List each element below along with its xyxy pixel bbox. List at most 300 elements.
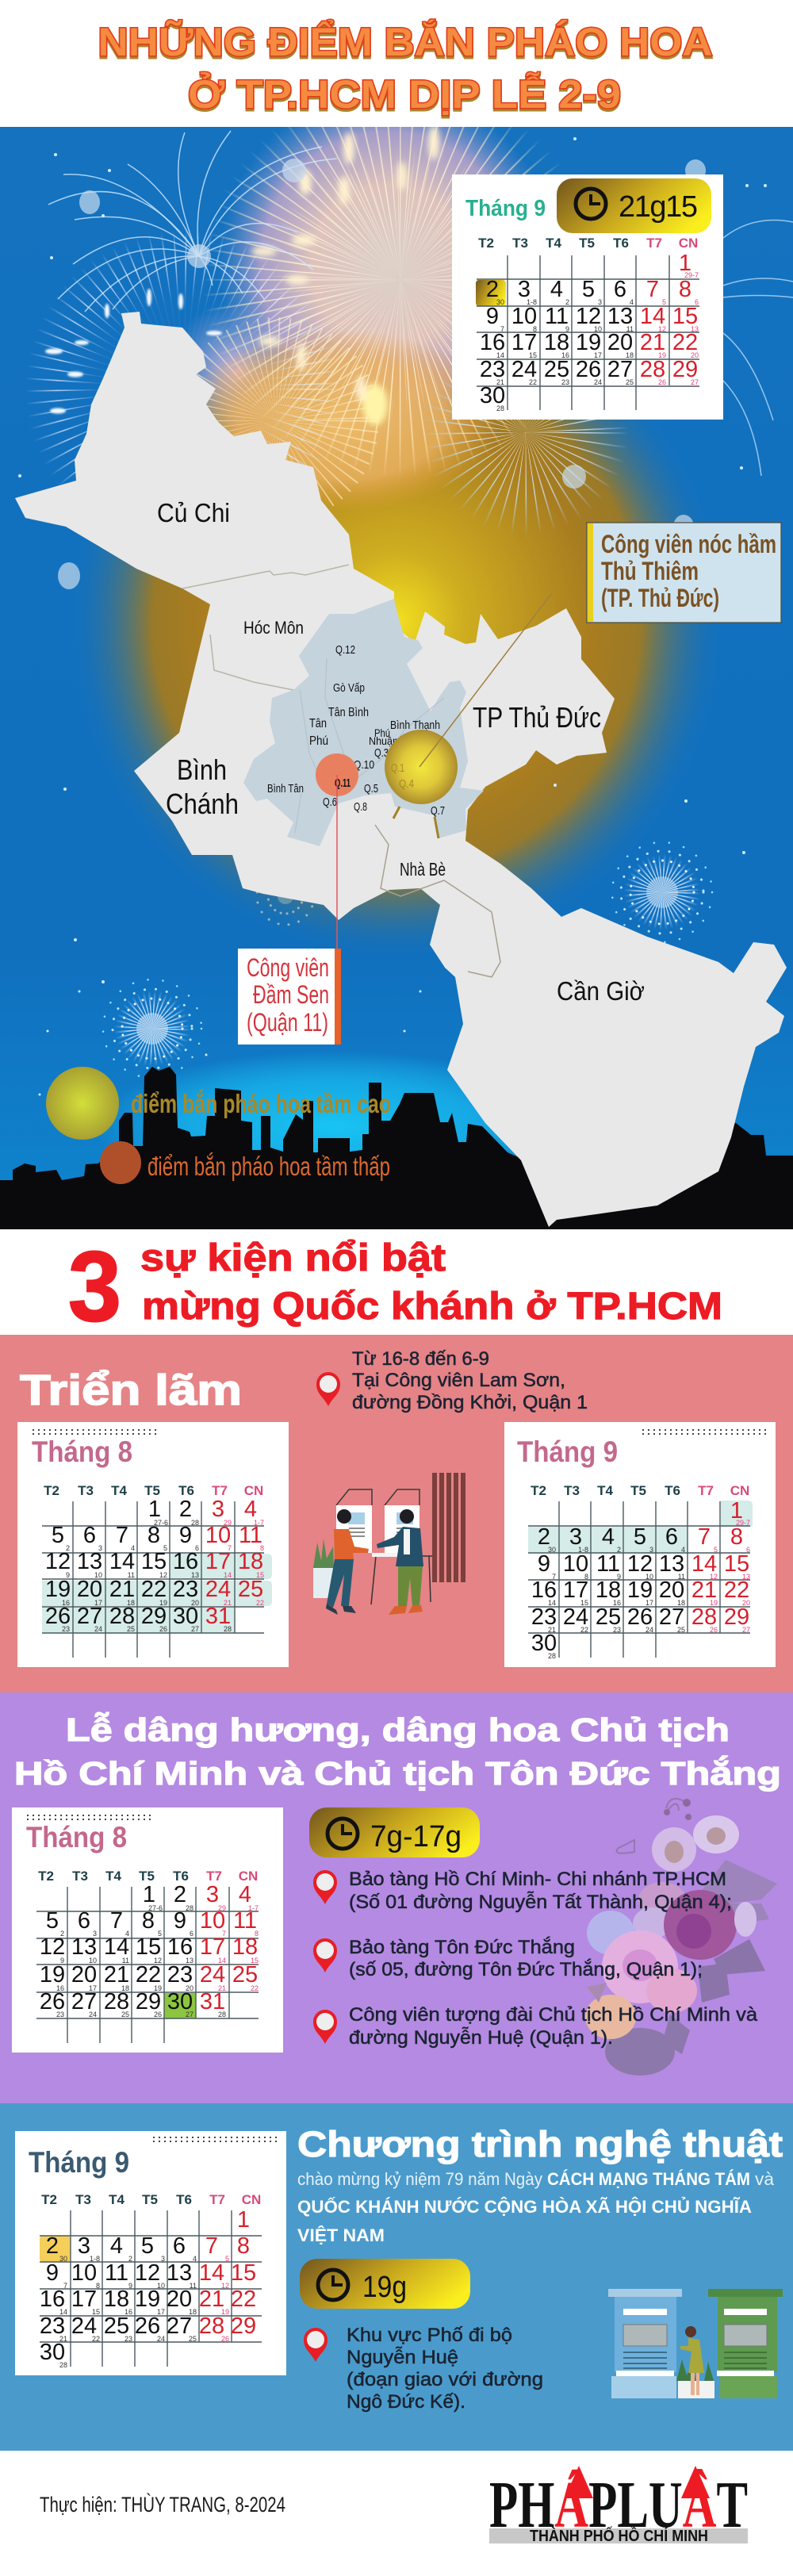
exhibition location text: Từ 16-8 đến 6-9 (352, 1348, 489, 1370)
day numbers: 21 (59, 2335, 67, 2343)
region labels: Q.5 (364, 782, 378, 795)
day numbers: 7 (228, 1544, 232, 1552)
day numbers: 23 (167, 1962, 193, 1988)
day numbers: 14 (218, 1957, 226, 1965)
day numbers: 24 (89, 2011, 97, 2018)
day numbers: 10 (200, 1908, 225, 1934)
day numbers: 24 (563, 1604, 588, 1630)
weekday row: T4 (109, 2192, 125, 2207)
day numbers: 7 (205, 2233, 218, 2259)
day numbers: 24 (200, 1962, 225, 1988)
day numbers: 18 (677, 1599, 685, 1607)
day numbers: 21 (104, 1962, 129, 1988)
day numbers: 24 (646, 1626, 653, 1634)
day numbers: 18 (127, 1599, 135, 1607)
day numbers: 18 (232, 1934, 258, 1960)
inner-city districts (243, 599, 484, 846)
day numbers: 2 (617, 1546, 621, 1554)
binding dots (27, 1815, 152, 1819)
day numbers: 26 (135, 2313, 160, 2339)
day numbers: 5 (46, 1908, 59, 1934)
legend: high altitude: điểm bắn pháo hoa tầm cao (131, 1089, 391, 1118)
day numbers: 27-6 (148, 1904, 163, 1912)
day numbers: 3 (598, 298, 602, 306)
day numbers: 2 (179, 1497, 192, 1522)
weekday row: T3 (72, 1869, 88, 1884)
weekday row (41, 2192, 261, 2207)
day numbers: 5 (163, 1544, 167, 1552)
day numbers: 10 (511, 304, 537, 329)
day numbers: 11 (233, 1908, 257, 1934)
day numbers: 17 (646, 1599, 653, 1607)
day numbers: 13 (691, 325, 699, 333)
day numbers: 1-8 (90, 2255, 100, 2263)
calendar: August exhibition (17, 1422, 289, 1667)
calendar: September art programme (15, 2131, 286, 2375)
day numbers: 10 (563, 1551, 588, 1577)
day numbers: 26 (627, 1604, 653, 1630)
day numbers: 12 (710, 1573, 718, 1581)
day numbers: 17 (511, 330, 537, 355)
panel: incense offering ceremony (0, 1692, 793, 2103)
day numbers: 13 (659, 1551, 684, 1577)
weekday row (38, 1869, 258, 1884)
day numbers: 4 (602, 1524, 615, 1550)
day numbers: 18 (121, 1984, 129, 1992)
day numbers: 24 (511, 357, 537, 382)
day numbers: 9 (617, 1573, 621, 1581)
location 3: đường Nguyễn Huệ (Quận 1). (349, 2027, 613, 2049)
day numbers: 10 (89, 1957, 97, 1965)
day numbers: 4 (131, 1544, 135, 1552)
orange firework glow (204, 332, 492, 504)
day numbers: 15 (724, 1551, 749, 1577)
day numbers: 30 (548, 1546, 556, 1554)
day numbers: 2 (66, 1544, 70, 1552)
highlighted days 1-6 (528, 1501, 753, 1553)
programme description: và (755, 2169, 775, 2189)
day numbers: 1-7 (248, 1904, 259, 1912)
day numbers: 19 (45, 1577, 71, 1602)
day numbers: 30 (59, 2255, 67, 2263)
day numbers: 7 (646, 277, 659, 302)
day numbers: 27 (77, 1604, 102, 1629)
day numbers: 17 (71, 2287, 97, 2312)
weekday row: T6 (613, 236, 629, 251)
day numbers: 2 (486, 277, 499, 302)
day numbers: 30 (480, 383, 505, 408)
day numbers: 19 (154, 1984, 162, 1992)
logo: Phap Luat: PHÁPLUÂT (489, 2468, 748, 2542)
bright ray tips (251, 125, 439, 425)
day numbers: 8 (730, 1524, 743, 1550)
weekday row: T7 (698, 1483, 714, 1498)
day numbers: 9 (66, 1571, 70, 1579)
day numbers: 11 (105, 2260, 128, 2286)
weekday row: T5 (144, 1483, 160, 1498)
day numbers: 21 (496, 378, 504, 386)
low-altitude marker: Dam Sen: Q.11 (335, 776, 351, 790)
day numbers: 1-8 (527, 298, 537, 306)
day numbers: 22 (141, 1577, 167, 1602)
location: Nguyen Hue walking street: (đoạn giao với đường (347, 2369, 543, 2390)
legend: low altitude (100, 1141, 390, 1184)
day numbers: 8 (260, 1544, 264, 1552)
heading: art programme: Chương trình nghệ thuật (297, 2124, 783, 2164)
weekday row: T6 (178, 1483, 194, 1498)
location: Nguyen Hue walking street: Khu vực Phố đi bộ (347, 2325, 512, 2346)
cyan skyline glow (109, 1055, 517, 1156)
day numbers: 21 (199, 2287, 224, 2312)
weekday row: T7 (209, 2192, 225, 2207)
region labels: Bình Tân (267, 782, 304, 795)
month label: Tháng 8 (32, 1436, 132, 1468)
location 2 (313, 1937, 703, 1980)
callout: Dam Sen: Công viên (247, 953, 329, 982)
main firework cloud (222, 127, 531, 421)
location 1 (313, 1869, 732, 1913)
high-altitude marker: Thu Thiem: Q.1 (391, 761, 404, 775)
day numbers: 12 (159, 1571, 167, 1579)
day numbers: 13 (186, 1957, 193, 1965)
day numbers: 3 (569, 1524, 582, 1550)
day numbers: 5 (662, 298, 666, 306)
day numbers: 21 (640, 330, 665, 355)
day numbers: 7 (552, 1573, 556, 1581)
weekday row: CN (679, 236, 698, 251)
callout: Thu Thiem (587, 523, 781, 623)
day numbers: 12 (576, 304, 601, 329)
programme description: VIỆT NAM (297, 2225, 385, 2245)
month label: Tháng 8 (26, 1821, 127, 1853)
region labels: Hóc Môn (243, 618, 304, 638)
day numbers: 14 (496, 351, 504, 359)
region labels (157, 498, 645, 1006)
day numbers: 28 (186, 1904, 193, 1912)
time pill: 21g15 (619, 190, 698, 224)
day numbers: 8 (255, 1930, 259, 1938)
day numbers: 27 (607, 357, 633, 382)
exhibition location text (352, 1348, 588, 1413)
weekday row: T2 (531, 1483, 546, 1498)
region labels: Tân Bình (328, 706, 369, 719)
day numbers: 11 (122, 1957, 129, 1965)
day numbers: 27 (186, 2011, 193, 2018)
day numbers: 15 (141, 1549, 167, 1574)
day numbers: 15 (136, 1934, 161, 1960)
day numbers: 2 (60, 1930, 64, 1938)
day numbers: 26 (221, 2335, 229, 2343)
weekday row: T4 (546, 236, 561, 251)
grid (477, 255, 699, 410)
time pill: 7g-17g (309, 1807, 480, 1857)
day numbers: 14 (691, 1551, 717, 1577)
day numbers: 5 (582, 277, 595, 302)
calendar card (15, 2131, 286, 2375)
day numbers: 10 (646, 1573, 653, 1581)
illustration: flower bouquet (585, 1799, 777, 2076)
day numbers (531, 1498, 750, 1660)
day numbers: 12 (627, 1551, 653, 1577)
region labels: Bình (177, 753, 227, 786)
region labels: Nhà Bè (400, 859, 446, 880)
day numbers: 26 (710, 1626, 718, 1634)
day numbers: 20 (691, 351, 699, 359)
day numbers: 9 (60, 1957, 64, 1965)
day numbers: 25 (677, 1626, 685, 1634)
day numbers: 7 (698, 1524, 711, 1550)
weekday row: T6 (665, 1483, 680, 1498)
day numbers: 30 (173, 1604, 198, 1629)
day numbers: 13 (77, 1549, 102, 1574)
day numbers: 3 (93, 1930, 97, 1938)
day numbers: 8 (142, 1908, 155, 1934)
day numbers: 8 (533, 325, 537, 333)
heading: ceremony: Hồ Chí Minh và Chủ tịch Tôn Đức Thắng (14, 1755, 781, 1792)
region labels: Q.7 (431, 804, 445, 818)
month label: Tháng 9 (517, 1436, 618, 1468)
calendar card (17, 1422, 289, 1667)
illustration: exhibition booths (608, 2289, 783, 2398)
calendar: September fireworks (452, 174, 723, 420)
day numbers: 16 (40, 2287, 65, 2312)
binding dots (153, 2137, 277, 2141)
day numbers: 16 (167, 1934, 193, 1960)
day numbers: 17 (200, 1934, 225, 1960)
day numbers: 23 (173, 1577, 198, 1602)
day numbers: 21 (109, 1577, 135, 1602)
day numbers: 25 (544, 357, 569, 382)
day numbers: 22 (231, 2287, 256, 2312)
day numbers (480, 251, 699, 412)
day numbers: 19 (576, 330, 601, 355)
weekday row: T5 (139, 1869, 155, 1884)
day numbers: 17 (94, 1599, 102, 1607)
weekday row: T3 (75, 2192, 91, 2207)
day numbers: 12 (45, 1549, 71, 1574)
day numbers: 22 (580, 1626, 588, 1634)
weekday row: T5 (579, 236, 595, 251)
day numbers: 15 (672, 304, 698, 329)
location 3: Công viên tượng đài Chủ tịch Hồ Chí Minh và (349, 2004, 758, 2026)
day numbers: 10 (71, 2260, 97, 2286)
weekday row: T6 (176, 2192, 192, 2207)
time pill: 19g (300, 2259, 470, 2309)
day numbers: 3 (98, 1544, 102, 1552)
day numbers: 2 (46, 2233, 59, 2259)
day numbers: 4 (125, 1930, 129, 1938)
weekday row: T2 (38, 1869, 54, 1884)
weekday row: T3 (512, 236, 528, 251)
day numbers: 9 (486, 304, 499, 329)
day numbers: 23 (561, 378, 569, 386)
day numbers: 13 (191, 1571, 199, 1579)
day numbers: 15 (231, 2260, 256, 2286)
weekday row (531, 1483, 749, 1498)
day numbers: 18 (238, 1549, 263, 1574)
day numbers: 29 (224, 1519, 232, 1527)
high-altitude marker: Thu Thiem: Q.4 (399, 777, 414, 791)
highlighted days 16-31 (42, 1554, 272, 1633)
day numbers: 12 (40, 1934, 65, 1960)
right arc firework (723, 220, 793, 476)
region labels: Củ Chi (157, 498, 230, 527)
day numbers: 17 (563, 1577, 588, 1603)
day numbers: 16 (480, 330, 505, 355)
day numbers: 6 (173, 2233, 186, 2259)
day numbers: 27 (659, 1604, 684, 1630)
day numbers: 26 (576, 357, 601, 382)
weekday row: CN (242, 2192, 261, 2207)
region labels: Chánh (166, 788, 239, 820)
day numbers: 8 (96, 2282, 100, 2290)
grid (42, 1501, 264, 1658)
day numbers: 27 (742, 1626, 750, 1634)
region labels: Nhuận (369, 734, 398, 747)
day numbers: 22 (136, 1962, 161, 1988)
left firework bright tips (45, 289, 222, 414)
sparkle stars (18, 137, 767, 1096)
day numbers: 28 (109, 1604, 135, 1629)
region labels: Phú (309, 734, 328, 748)
day numbers: 20 (77, 1577, 102, 1602)
region labels: Q.10 (354, 758, 374, 772)
region labels: Tân (309, 717, 327, 730)
month label: Tháng 9 (29, 2146, 129, 2179)
time pill (557, 178, 711, 233)
day numbers: 2 (538, 1524, 550, 1550)
lower white firework (474, 381, 577, 484)
day numbers: 2 (128, 2255, 132, 2263)
day numbers: 28 (496, 404, 504, 412)
programme description: CÁCH MẠNG THÁNG TÁM (547, 2169, 750, 2189)
day numbers: 6 (665, 1524, 678, 1550)
day numbers (45, 1497, 264, 1633)
day numbers: 12 (658, 325, 666, 333)
location 2: Bảo tàng Tôn Đức Thắng (349, 1937, 575, 1958)
day numbers: 19 (159, 1599, 167, 1607)
panel: art programme (0, 2103, 793, 2451)
day numbers: 13 (71, 1934, 97, 1960)
day numbers: 10 (594, 325, 602, 333)
day numbers: 25 (238, 1577, 263, 1602)
day numbers: 26 (159, 1625, 167, 1633)
day numbers: 4 (244, 1497, 257, 1522)
heading: ceremony (14, 1712, 781, 1792)
heading: exhibition: Triển lãm (20, 1367, 242, 1414)
district borders and rivers (182, 565, 500, 977)
day numbers: 16 (62, 1599, 70, 1607)
sparkle firework near Dam Sen (255, 891, 314, 926)
binding dots (33, 1430, 158, 1434)
day numbers: 22 (672, 330, 698, 355)
day numbers: 26 (40, 1989, 65, 2014)
day numbers: 10 (94, 1571, 102, 1579)
day numbers: 11 (596, 1551, 620, 1577)
day numbers: 8 (679, 277, 691, 302)
day numbers: 25 (626, 378, 634, 386)
day numbers: 13 (167, 2260, 192, 2286)
night sky background (0, 127, 793, 1229)
location: Nguyen Hue walking street: Ngô Đức Kế). (347, 2391, 465, 2413)
heading: 3 events (0, 1229, 793, 1342)
main firework rays (224, 181, 500, 472)
day numbers: 16 (531, 1577, 557, 1603)
day numbers: 6 (195, 1544, 199, 1552)
day numbers (40, 1882, 259, 2018)
day numbers: 21 (548, 1626, 556, 1634)
programme description: QUỐC KHÁNH NƯỚC CỘNG HÒA XÃ HỘI CHỦ NGHĨA (297, 2196, 752, 2217)
day numbers: 21 (218, 1984, 226, 1992)
lilac firework glow (186, 306, 284, 431)
callout: Thu Thiem: Thủ Thiêm (601, 557, 699, 585)
programme description (297, 2169, 775, 2245)
exhibition location text: Tại Công viên Lam Sơn, (352, 1370, 565, 1391)
day numbers: 1 (237, 2207, 250, 2233)
day numbers: 28 (218, 2011, 226, 2018)
blue firework left (103, 979, 201, 1078)
day numbers: 14 (109, 1549, 135, 1574)
day numbers: 1-8 (578, 1546, 588, 1554)
day numbers: 7 (110, 1908, 123, 1934)
day numbers: 3 (649, 1546, 653, 1554)
day numbers: 14 (640, 304, 665, 329)
legend: high altitude (46, 1067, 391, 1140)
title (0, 0, 793, 127)
day numbers: 6 (83, 1523, 96, 1548)
day numbers: 22 (92, 2335, 100, 2343)
day numbers: 4 (681, 1546, 685, 1554)
weekday row: T6 (173, 1869, 189, 1884)
left white-blue firework rays (105, 309, 263, 468)
region labels: TP Thủ Đức (473, 701, 601, 734)
day numbers: 9 (538, 1551, 550, 1577)
day numbers: 16 (173, 1549, 198, 1574)
day numbers: 5 (225, 2255, 229, 2263)
day numbers: 13 (742, 1573, 750, 1581)
day numbers: 27 (167, 2313, 192, 2339)
region labels: Q.8 (354, 800, 367, 814)
day numbers: 24 (205, 1577, 231, 1602)
calendar card (504, 1422, 776, 1667)
day numbers: 3 (206, 1882, 219, 1907)
day numbers: 1 (148, 1497, 161, 1522)
day numbers: 16 (613, 1599, 621, 1607)
day numbers: 31 (200, 1989, 225, 2014)
icon: location pin (316, 1372, 340, 1406)
day numbers: 25 (232, 1962, 258, 1988)
day numbers: 3 (78, 2233, 90, 2259)
logo: Phap Luat: THÀNH PHỐ HỒ CHÍ MINH (530, 2526, 708, 2545)
region labels: Cần Giờ (557, 976, 645, 1006)
day numbers: 4 (630, 298, 634, 306)
calendar: August ceremony (12, 1807, 283, 2053)
day numbers: 26 (45, 1604, 71, 1629)
day numbers: 20 (742, 1599, 750, 1607)
weekday row: CN (730, 1483, 749, 1498)
day numbers: 23 (613, 1626, 621, 1634)
heading: ceremony: Lễ dâng hương, dâng hoa Chủ tịch (66, 1712, 730, 1748)
day numbers: 12 (221, 2282, 229, 2290)
day numbers: 4 (239, 1882, 251, 1907)
day numbers: 29 (141, 1604, 167, 1629)
day numbers: 25 (189, 2335, 197, 2343)
day numbers: 25 (127, 1625, 135, 1633)
day numbers: 16 (125, 2308, 132, 2316)
time pill: 19g: 19g (362, 2271, 407, 2304)
day numbers: 6 (746, 1546, 750, 1554)
weekday row: T2 (478, 236, 494, 251)
